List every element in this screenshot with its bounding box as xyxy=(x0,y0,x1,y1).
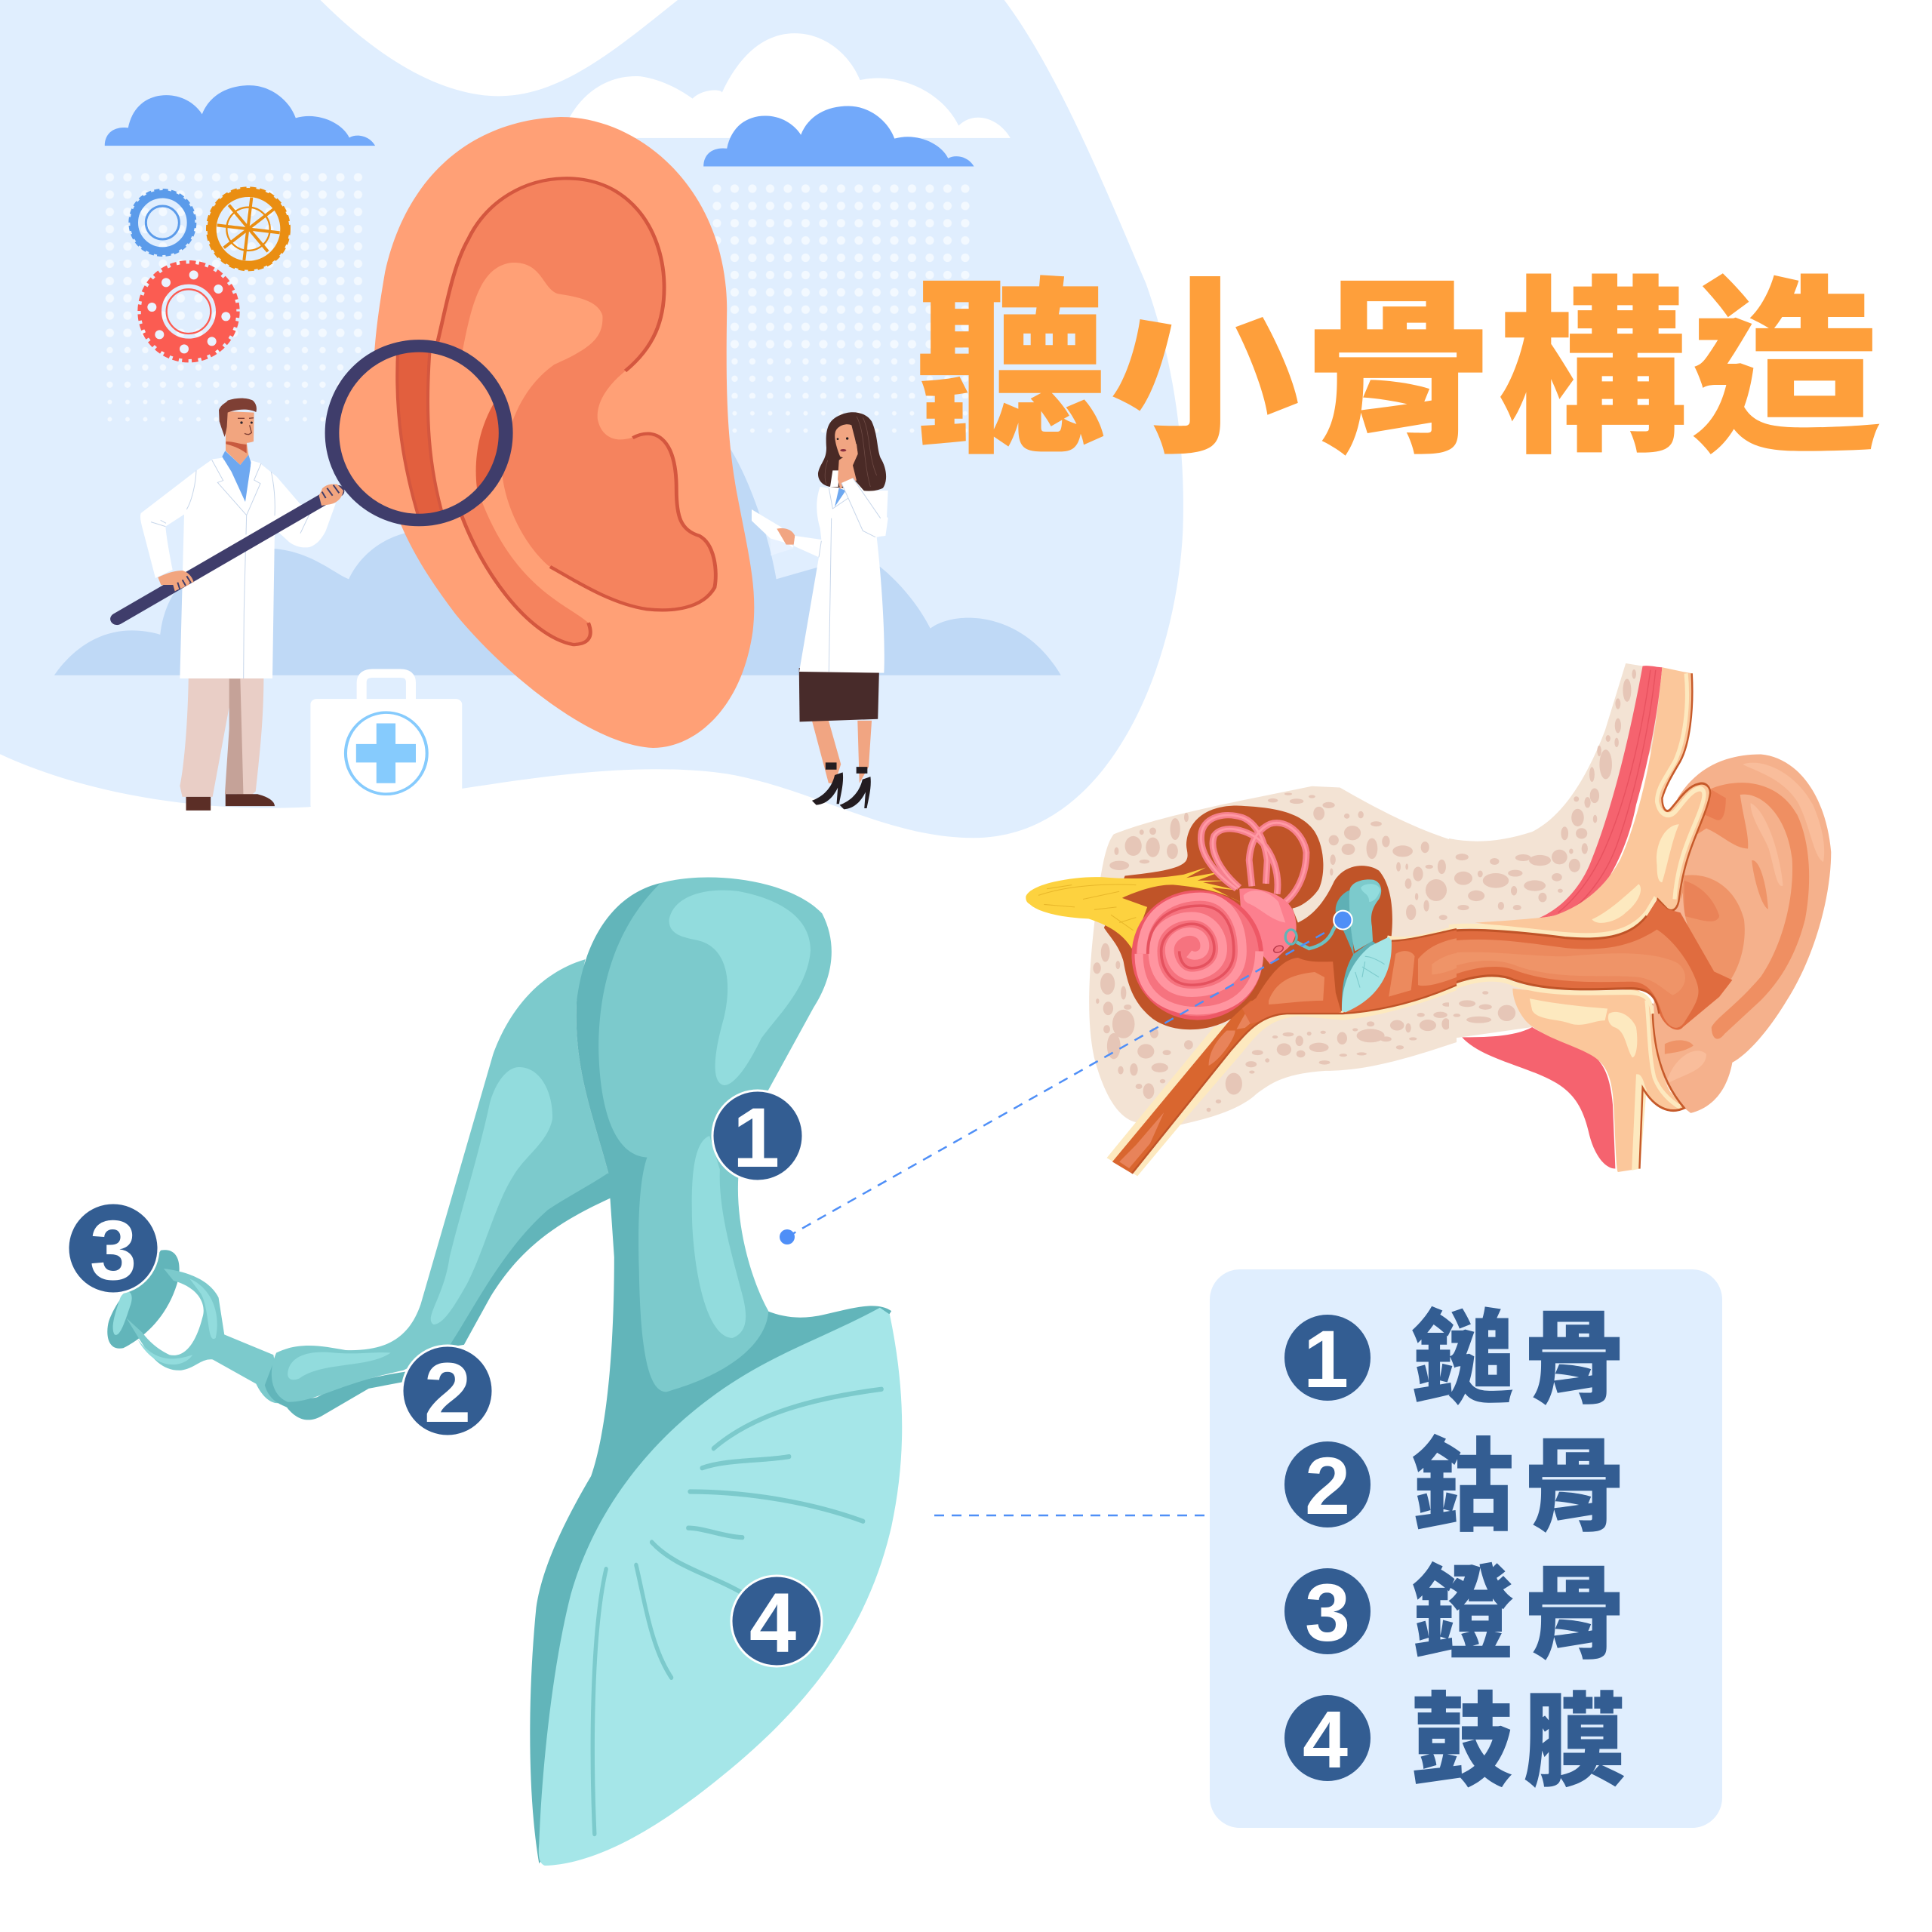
tympanic membrane xyxy=(539,1308,902,1866)
horizon clouds xyxy=(54,444,1061,675)
dashed leader to legend xyxy=(934,1515,1208,1516)
legend item 1: 1 xyxy=(1303,1313,1349,1404)
red muscle xyxy=(1537,666,1662,918)
outer ear, canal and skin layers xyxy=(1449,666,1831,1172)
left doctor xyxy=(140,398,336,811)
numbered badges xyxy=(68,1091,822,1670)
title: 聽小骨構造 xyxy=(915,265,1885,477)
small stapes and incus xyxy=(1285,918,1340,949)
canal inner end xyxy=(1132,928,1457,1174)
lower skin and red tissue xyxy=(1462,989,1684,1172)
temporal bone xyxy=(1089,663,1683,1125)
hands on magnifier handle xyxy=(158,485,343,591)
ossicle large illustration xyxy=(107,878,902,1866)
incus xyxy=(265,959,614,1420)
blue clouds xyxy=(105,85,974,167)
small malleus xyxy=(1336,879,1381,956)
badge 1 xyxy=(712,1091,803,1185)
middle and inner ear xyxy=(1026,806,1457,1176)
legend item 1: 鎚骨 xyxy=(1411,1302,1635,1417)
legend item 4: 鼓膜 xyxy=(1411,1684,1635,1799)
badge 2: 2 xyxy=(424,1346,471,1440)
pinna xyxy=(1653,754,1831,1113)
stapes xyxy=(107,1250,282,1403)
legend item 2: 2 xyxy=(1305,1440,1350,1531)
legend panel xyxy=(1210,1269,1722,1828)
icon: blue gear xyxy=(131,190,195,255)
icon: orange gear xyxy=(208,189,288,269)
badge 3 xyxy=(68,1203,158,1297)
white cloud xyxy=(561,33,1011,138)
dot grid right xyxy=(711,181,977,436)
malleus xyxy=(530,878,891,1863)
legend item 2 xyxy=(1284,1429,1635,1544)
legs xyxy=(180,677,275,811)
inner cavity xyxy=(1104,806,1392,1029)
magnifying glass xyxy=(117,337,512,619)
badge 3: 3 xyxy=(90,1203,137,1297)
right doctor xyxy=(752,412,888,809)
medical kit xyxy=(310,673,462,811)
badge 4: 4 xyxy=(749,1576,796,1670)
legend item 1 xyxy=(1284,1302,1635,1417)
skirt and legs xyxy=(799,668,879,809)
dot grid left xyxy=(103,171,368,426)
upper skin layer xyxy=(1475,667,1710,936)
big ear xyxy=(374,117,754,748)
legend item 2: 鈷骨 xyxy=(1411,1429,1635,1544)
legend item 3: 3 xyxy=(1305,1567,1350,1658)
middle ear floor xyxy=(1242,958,1341,1024)
dashed leader to anatomy xyxy=(787,930,1330,1237)
small eardrum xyxy=(1342,937,1392,1012)
legend item 4: 4 xyxy=(1303,1694,1348,1785)
canal xyxy=(1449,897,1732,1030)
coat and head xyxy=(752,412,888,673)
yellow nerve xyxy=(1026,868,1242,949)
icon: red gear xyxy=(140,263,237,360)
background blob xyxy=(0,0,1183,838)
legend item 3: 鐙骨 xyxy=(1411,1557,1635,1672)
badge 2 xyxy=(402,1346,493,1440)
cochlea spiral xyxy=(1131,890,1263,1020)
leader dot xyxy=(780,1229,795,1244)
vestibule xyxy=(1239,888,1297,964)
anatomy of the ear diagram xyxy=(1026,663,1831,1176)
semicircular canals xyxy=(1201,815,1306,902)
gears xyxy=(131,189,288,360)
badge 4 xyxy=(731,1576,822,1670)
blue marker xyxy=(1334,911,1352,929)
legend item 4 xyxy=(1284,1684,1635,1799)
eustachian tube and cream lining xyxy=(1107,983,1457,1176)
torso and head xyxy=(140,398,336,678)
oval window xyxy=(1272,944,1284,954)
legend item 3 xyxy=(1284,1557,1635,1672)
badge 1: 1 xyxy=(733,1091,780,1185)
